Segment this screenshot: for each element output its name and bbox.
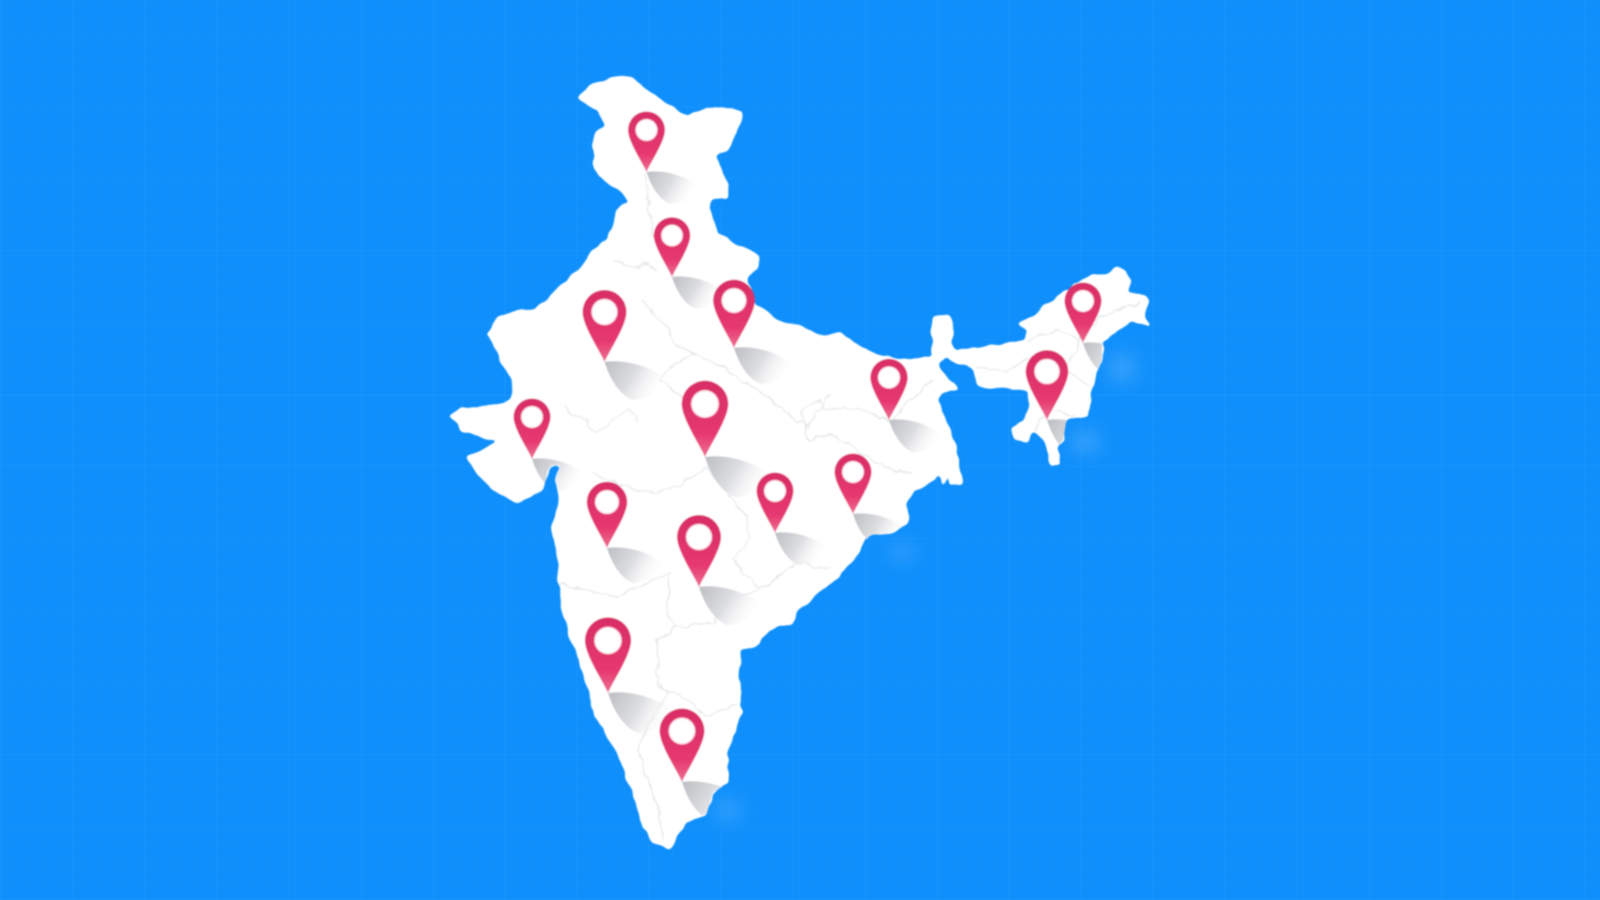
- icon: pin Odisha: [835, 454, 871, 514]
- icon: pin Uttar Pradesh: [713, 280, 755, 348]
- map: India outline: [450, 77, 1150, 847]
- icon: pin Tamil Nadu: [660, 709, 704, 782]
- icon: pin Telangana: [677, 515, 721, 587]
- icon: pin Maharashtra: [587, 482, 627, 548]
- icon: pin Gujarat: [514, 399, 550, 459]
- icon: pin Karnataka: [585, 617, 631, 693]
- state borders: [560, 175, 1140, 840]
- icon: pin Madhya Pradesh: [682, 381, 728, 457]
- icon: pin Uttarakhand: [654, 217, 690, 277]
- icon: pin Arunachal Pradesh: [1065, 283, 1101, 343]
- pin shadows clipped to the map: [532, 171, 1138, 821]
- icon: pin Assam: [1026, 350, 1068, 420]
- icon: pin Rajasthan: [582, 290, 626, 362]
- infographic: map of India with pins: [449, 74, 1150, 850]
- icon: pin Jammu and Kashmir: [628, 112, 665, 172]
- faint shadow glow outside the map: [714, 352, 1136, 820]
- icon: pin Chhattisgarh: [757, 473, 793, 533]
- icon: pin West Bengal: [870, 359, 908, 420]
